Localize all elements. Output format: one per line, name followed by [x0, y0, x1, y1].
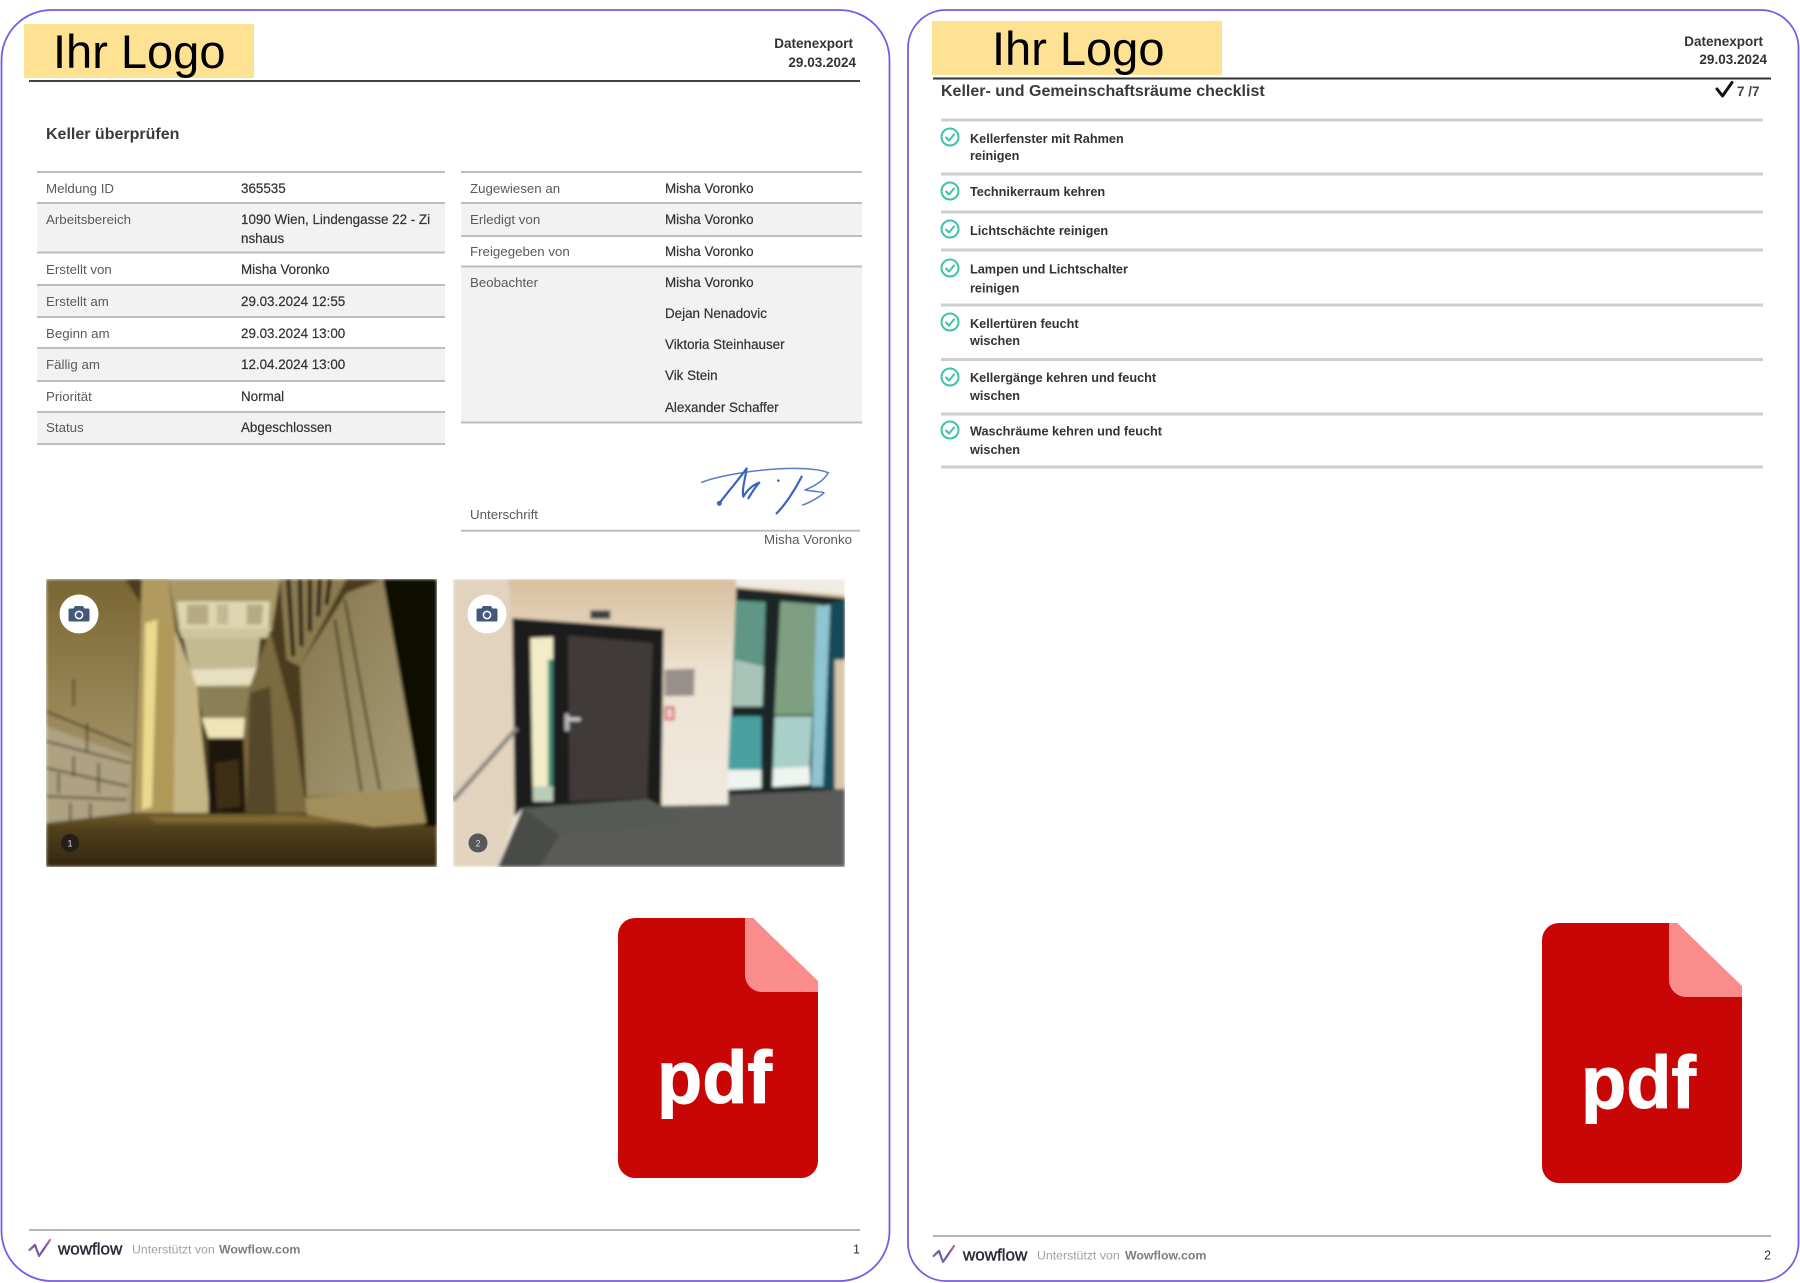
footer page 2: 2: [1764, 1248, 1771, 1262]
table: assignees: Zugewiesen an: [470, 181, 560, 196]
table: report details: [37, 172, 445, 444]
footer page 2: [934, 1246, 1771, 1264]
table: report details: nshaus: [241, 231, 284, 246]
checklist item 4: Lampen und Lichtschalter: [970, 262, 1128, 276]
icon: pdf file page 1: [618, 918, 818, 1178]
table: report details: Fällig am: [46, 357, 100, 372]
checklist item 5: wischen: [969, 334, 1020, 348]
photo number 2: 2: [475, 838, 481, 848]
logo placeholder page 1: Ihr Logo: [53, 25, 225, 78]
footer page 2: wowflow: [962, 1246, 1028, 1264]
checklist item 4: reinigen: [970, 282, 1019, 296]
table: report details: Status: [46, 420, 84, 435]
table: assignees: [461, 172, 862, 422]
footer page 1: 1: [853, 1242, 860, 1256]
heading: report title: Keller überprüfen: [46, 126, 179, 143]
photo 2: door in hallway: [453, 579, 845, 867]
checklist item 6: Kellergänge kehren und feucht: [970, 371, 1157, 385]
icon: camera badge photo 1: [60, 594, 98, 634]
photo number 1: 1: [67, 838, 73, 848]
table: report details: Meldung ID: [46, 181, 114, 196]
signature block: [461, 468, 860, 547]
signature block: Misha Voronko: [764, 532, 852, 547]
checklist item 6: [942, 368, 1157, 403]
footer page 2: Unterstützt von: [1037, 1248, 1120, 1262]
footer page 2: Wowflow.com: [1125, 1248, 1206, 1262]
logo placeholder page 2: [932, 21, 1222, 75]
table: report details: 365535: [241, 181, 286, 196]
table: report details: Erstellt von: [46, 262, 112, 277]
checklist item 7: wischen: [969, 443, 1020, 457]
logo placeholder page 2: Ihr Logo: [992, 22, 1164, 75]
photo 1: basement corridor: [46, 579, 437, 867]
checklist item 2: [942, 182, 1105, 200]
export date page 2: Datenexport: [1684, 34, 1764, 49]
footer page 1: [30, 1240, 860, 1258]
checklist item 3: Lichtschächte reinigen: [970, 224, 1108, 238]
table: assignees: Vik Stein: [665, 368, 718, 383]
table: assignees: Freigegeben von: [470, 244, 570, 259]
panel: report page 2 checklist: [908, 10, 1798, 1281]
table: report details: 12.04.2024 13:00: [241, 357, 345, 372]
checklist progress: [1717, 82, 1760, 99]
page 2 frame: [908, 10, 1798, 1281]
icon: wowflow mark: [934, 1246, 954, 1262]
checklist item 7: [942, 422, 1163, 457]
checklist item 1: [942, 128, 1124, 163]
icon: wowflow mark: [30, 1240, 50, 1256]
table: assignees: Misha Voronko: [665, 212, 754, 227]
footer page 1: wowflow: [57, 1240, 123, 1258]
checklist item 4: [942, 260, 1128, 296]
table: assignees: Dejan Nenadovic: [665, 306, 767, 321]
icon: pdf file page 1: pdf: [657, 1036, 772, 1119]
checklist item 5: Kellertüren feucht: [970, 317, 1079, 331]
table: assignees: Misha Voronko: [665, 275, 754, 290]
table: assignees: Misha Voronko: [665, 244, 754, 259]
table: assignees: Misha Voronko: [665, 181, 754, 196]
checklist item 5: [942, 314, 1079, 348]
table: assignees: Beobachter: [470, 275, 539, 290]
icon: handwritten signature: [702, 468, 828, 513]
icon: camera badge photo 2: [468, 594, 506, 634]
table: assignees: Erledigt von: [470, 212, 540, 227]
table: assignees: Alexander Schaffer: [665, 400, 779, 415]
checklist items: [941, 120, 1763, 467]
checklist item 1: Kellerfenster mit Rahmen: [970, 132, 1124, 146]
table: report details: Priorität: [46, 389, 92, 404]
checklist item 3: [942, 220, 1108, 238]
table: assignees: Viktoria Steinhauser: [665, 337, 785, 352]
table: report details: Erstellt am: [46, 294, 109, 309]
table: report details: 1090 Wien, Lindengasse 22 - Zi: [241, 212, 430, 227]
heading: checklist title: Keller- und Gemeinschaftsräume checklist: [941, 83, 1265, 100]
icon: pdf file page 2: [1542, 923, 1742, 1183]
footer page 1: Wowflow.com: [219, 1242, 300, 1256]
table: report details: 29.03.2024 12:55: [241, 294, 345, 309]
table: report details: Arbeitsbereich: [46, 212, 131, 227]
signature block: Unterschrift: [470, 507, 538, 522]
page 1 frame: [2, 10, 890, 1281]
checklist progress: 7 /7: [1737, 84, 1760, 99]
checklist item 2: Technikerraum kehren: [970, 185, 1105, 199]
checklist item 7: Waschräume kehren und feucht: [970, 424, 1163, 438]
photo number 1: [61, 834, 79, 852]
photo number 2: [468, 834, 488, 852]
footer page 1: Unterstützt von: [132, 1242, 215, 1256]
table: report details: Abgeschlossen: [241, 420, 332, 435]
panel: report page 1: [2, 10, 890, 1281]
table: report details: Beginn am: [46, 326, 110, 341]
export date page 2: 29.03.2024: [1699, 52, 1767, 67]
checklist item 6: wischen: [969, 389, 1020, 403]
export date page 1: Datenexport: [774, 36, 854, 51]
icon: pdf file page 2: pdf: [1581, 1041, 1696, 1124]
checklist item 1: reinigen: [970, 149, 1019, 163]
export date page 2: [1684, 34, 1767, 67]
table: report details: 29.03.2024 13:00: [241, 326, 345, 341]
export date page 1: 29.03.2024: [788, 55, 856, 70]
table: report details: Misha Voronko: [241, 262, 330, 277]
table: report details: Normal: [241, 389, 284, 404]
export date page 1: [774, 36, 856, 70]
